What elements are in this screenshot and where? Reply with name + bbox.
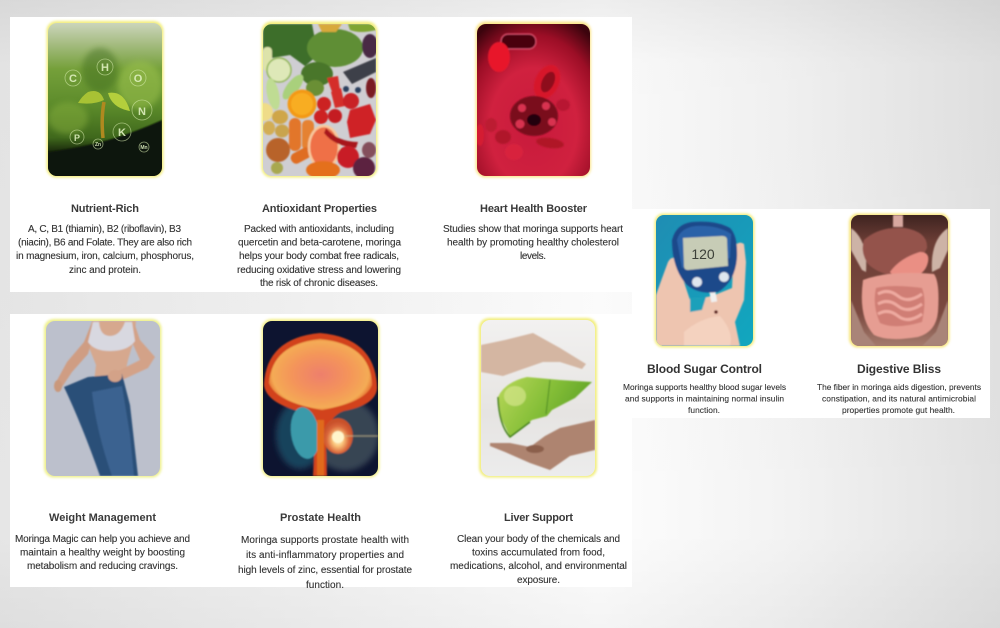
description: toxins accumulated from food, [472, 548, 605, 558]
image: sprout with nutrient hexagons: H [101, 62, 109, 74]
panel: right side benefits [623, 209, 990, 418]
description [16, 224, 194, 276]
card: Weight Management [15, 319, 190, 572]
description: Studies show that moringa supports heart [443, 224, 623, 235]
description: the risk of chronic diseases. [260, 278, 378, 289]
panel: top row of benefits [10, 17, 632, 292]
description: (niacin), B6 and Folate. They are also rich [18, 238, 192, 248]
description: Packed with antioxidants, including [244, 224, 394, 235]
description: and supports in maintaining normal insulin [625, 394, 784, 404]
card: Nutrient-Rich [16, 21, 194, 276]
description [623, 382, 786, 415]
meter reading: 120 [691, 246, 715, 262]
card: Heart Health Booster [443, 22, 623, 262]
description: high levels of zinc, essential for prostate [238, 565, 412, 576]
description [450, 534, 627, 586]
image: fruits and vegetables [255, 22, 378, 179]
card: Liver Support [450, 318, 627, 586]
heading: Blood Sugar Control [647, 362, 762, 376]
description: health by promoting healthy cholesterol [447, 238, 619, 248]
description: zinc and protein. [69, 265, 141, 276]
description: reducing oxidative stress and lowering [237, 265, 401, 276]
description [443, 224, 623, 262]
image: sprout with nutrient hexagons: K [118, 127, 126, 139]
heading: Heart Health Booster [480, 203, 588, 215]
description: in magnesium, iron, calcium, phosphorus, [16, 251, 194, 262]
image: sprout with nutrient hexagons: N [138, 106, 146, 118]
description: Clean your body of the chemicals and [457, 534, 620, 545]
image: bladder and glowing prostate [262, 319, 380, 478]
description: metabolism and reducing cravings. [27, 561, 178, 572]
heading: Prostate Health [280, 512, 361, 524]
heading: Weight Management [49, 512, 156, 524]
description: its anti-inflammatory properties and [246, 550, 404, 561]
description: function. [306, 580, 344, 591]
description: levels. [520, 251, 546, 262]
description: Moringa Magic can help you achieve and [15, 534, 190, 545]
heading: Nutrient-Rich [71, 203, 139, 215]
image: sprout with nutrient hexagons: O [134, 73, 143, 85]
description: constipation, and its natural antimicrobial [822, 394, 976, 404]
description: A, C, B1 (thiamin), B2 (riboflavin), B3 [28, 224, 181, 235]
description: The fiber in moringa aids digestion, prevents [817, 382, 981, 392]
image: sprout with nutrient hexagons: C [69, 73, 77, 85]
description: exposure. [517, 575, 560, 586]
card: Prostate Health [238, 319, 412, 591]
image: sprout with nutrient hexagons: P [74, 133, 80, 143]
description: function. [688, 405, 720, 415]
image: blood cells in artery [476, 22, 591, 178]
image: sprout with nutrient hexagons: Mn [140, 145, 148, 151]
card: Blood Sugar Control [623, 214, 786, 415]
image: sprout with nutrient hexagons [46, 21, 164, 178]
description: maintain a healthy weight by boosting [20, 548, 185, 558]
description [15, 534, 190, 572]
description: medications, alcohol, and environmental [450, 561, 627, 572]
description: Moringa supports prostate health with [241, 535, 409, 546]
description: quercetin and beta-carotene, moringa [238, 238, 401, 248]
description [237, 224, 401, 289]
image: sprout with nutrient hexagons: Zn [95, 142, 101, 148]
heading: Liver Support [504, 512, 573, 524]
image: woman in oversized jeans [44, 319, 162, 478]
heading: Antioxidant Properties [262, 203, 377, 215]
card: Antioxidant Properties [237, 22, 401, 289]
description [817, 382, 981, 415]
card: Digestive Bliss [817, 214, 981, 415]
image: glucose meter in hand [654, 214, 754, 348]
heading: Digestive Bliss [857, 362, 941, 376]
image: digestive system anatomy [849, 214, 950, 348]
description: helps your body combat free radicals, [239, 251, 399, 262]
description [238, 535, 412, 591]
description: properties promote gut health. [842, 405, 955, 415]
panel: bottom row of benefits [10, 314, 632, 591]
description: Moringa supports healthy blood sugar levels [623, 382, 786, 392]
image: hands protecting a green liver [479, 318, 597, 478]
